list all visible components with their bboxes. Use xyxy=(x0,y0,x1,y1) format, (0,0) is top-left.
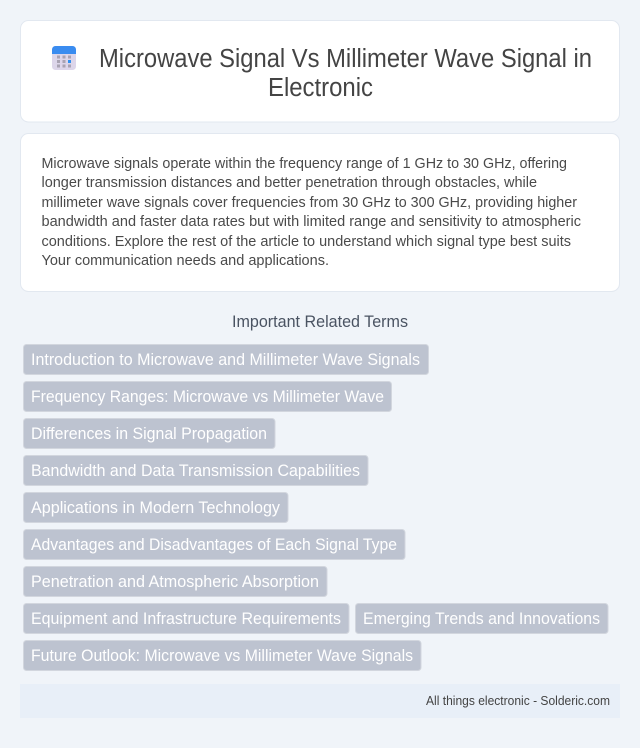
intro paragraph xyxy=(42,156,581,269)
tag: equipment: Equipment and Infrastructure Requirements xyxy=(31,609,341,628)
tag: advantages xyxy=(24,530,405,560)
title: Microwave Signal Vs Millimeter Wave Signal in xyxy=(99,45,592,73)
tag: penetration xyxy=(24,566,327,596)
tag: introduction: Introduction to Microwave and Millimeter Wave Signals xyxy=(31,350,420,369)
title xyxy=(99,45,592,102)
tag: future outlook: Future Outlook: Microwave vs Millimeter Wave Signals xyxy=(31,646,413,665)
tag: signal propagation xyxy=(24,418,275,448)
footer credit: All things electronic - Solderic.com xyxy=(426,694,610,708)
panel: intro text card xyxy=(20,134,620,292)
tag: signal propagation: Differences in Signal Propagation xyxy=(31,424,267,443)
intro paragraph: millimeter wave signals cover frequencies from 30 GHz to 300 GHz, providing higher xyxy=(42,195,577,211)
tag: introduction xyxy=(24,344,428,374)
footer xyxy=(20,684,620,718)
icon: calendar grid xyxy=(52,46,76,70)
tag: advantages: Advantages and Disadvantages of Each Signal Type xyxy=(31,535,397,554)
tag: frequency ranges: Frequency Ranges: Microwave vs Millimeter Wave xyxy=(31,387,384,406)
tag: applications: Applications in Modern Technology xyxy=(31,498,280,517)
tag: emerging trends: Emerging Trends and Innovations xyxy=(363,609,600,628)
intro paragraph: Microwave signals operate within the frequency range of 1 GHz to 30 GHz, offering xyxy=(42,156,567,172)
tag: future outlook xyxy=(24,640,421,670)
heading: important related terms: Important Related Terms xyxy=(232,313,408,331)
intro paragraph: longer transmission distances and better penetration through obstacles, while xyxy=(42,175,537,191)
intro paragraph: conditions. Explore the rest of the article to understand which signal type best suits xyxy=(42,234,571,250)
tag list xyxy=(24,344,608,670)
tag: penetration: Penetration and Atmospheric Absorption xyxy=(31,572,319,591)
tag: frequency ranges xyxy=(24,382,392,412)
intro paragraph: bandwidth and faster data rates but with limited range and sensitivity to atmospheric xyxy=(42,214,581,230)
title: Electronic xyxy=(268,74,373,102)
tag: bandwidth: Bandwidth and Data Transmission Capabilities xyxy=(31,461,360,480)
panel: header card xyxy=(20,20,620,122)
tag: equipment xyxy=(24,604,349,634)
tag: bandwidth xyxy=(24,456,368,486)
tag: emerging trends xyxy=(356,604,608,634)
tag: applications xyxy=(24,492,288,522)
intro paragraph: Your communication needs and applications. xyxy=(42,253,329,269)
